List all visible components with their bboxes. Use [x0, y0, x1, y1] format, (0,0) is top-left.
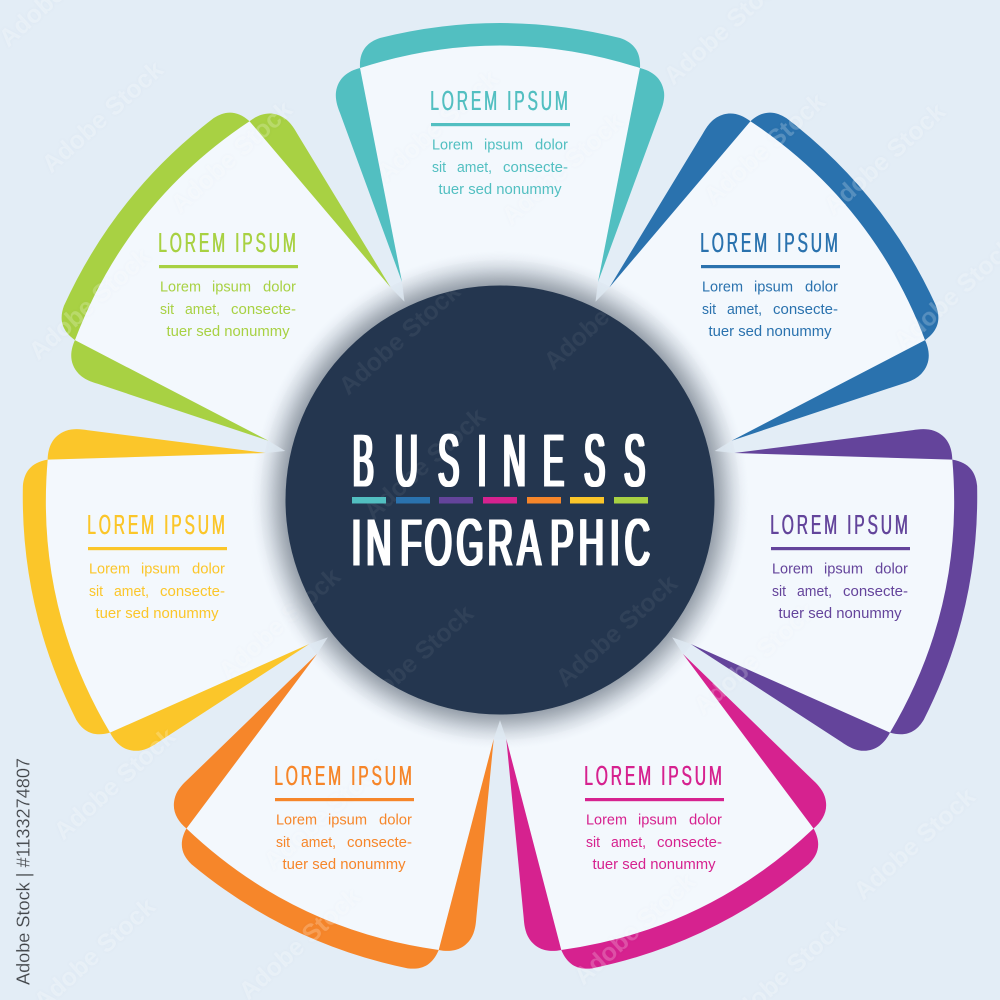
central circle [286, 286, 714, 714]
text block: yellow: amet, [114, 584, 149, 600]
text block: blue [700, 227, 840, 340]
panel: orange petal [145, 429, 648, 1000]
text block: teal: amet, [457, 160, 492, 176]
watermarks on light areas: Adobe Stock [497, 107, 629, 231]
text block: yellow: Lorem [89, 562, 130, 578]
text block: blue: ipsum [754, 280, 793, 296]
text block: magenta: tuer sed nonummy [592, 857, 716, 873]
text block: yellow: LOREM IPSUM [87, 509, 228, 540]
watermarks on light areas: Adobe Stock [689, 597, 821, 721]
watermarks on light areas: Adobe Stock [166, 95, 298, 219]
text block: teal: tuer sed nonummy [438, 182, 562, 198]
text block: blue: consecte- [773, 302, 838, 318]
text block: orange [274, 760, 414, 873]
text block: purple: sit [772, 584, 786, 600]
watermarks on light areas: Adobe Stock [259, 752, 391, 876]
text block: teal: dolor [535, 138, 568, 154]
text block: yellow: dolor [192, 562, 225, 578]
panel: blue petal [398, 74, 975, 628]
text block: green: ipsum [212, 280, 251, 296]
text block: green: tuer sed nonummy [166, 324, 290, 340]
watermarks on circle: Adobe Stock [214, 562, 346, 686]
watermarks on light areas: Adobe Stock [849, 782, 981, 906]
watermarks on circle: Adobe Stock [539, 252, 671, 376]
text block: teal: Lorem [432, 138, 473, 154]
text block: yellow [87, 509, 228, 622]
text block: purple: tuer sed nonummy [778, 606, 902, 622]
text block: magenta: dolor [689, 812, 722, 828]
text block: orange: Lorem [276, 812, 317, 828]
text block: magenta [584, 760, 724, 873]
panel: purple petal [463, 340, 1000, 766]
watermarks on circle: Adobe Stock [359, 402, 491, 526]
text block: green: amet, [185, 302, 220, 318]
watermarks on circle: Adobe Stock [551, 569, 683, 693]
text block: orange: LOREM IPSUM [274, 760, 414, 791]
watermarks on light areas: Adobe Stock [819, 97, 951, 221]
text block: magenta: LOREM IPSUM [584, 760, 724, 791]
text block: orange: amet, [301, 835, 336, 851]
text block: purple [770, 509, 910, 622]
text block: purple: Lorem [772, 562, 813, 578]
text block: purple: amet, [797, 584, 832, 600]
text block: yellow: ipsum [141, 562, 180, 578]
text block: yellow: consecte- [160, 584, 225, 600]
text block: orange: sit [276, 835, 290, 851]
text block: teal [430, 85, 570, 198]
text block: blue: dolor [805, 280, 838, 296]
title: business: BUSINESS [353, 420, 645, 503]
text block: green: consecte- [231, 302, 296, 318]
text block: orange: dolor [379, 812, 412, 828]
watermarks on light areas: Adobe Stock [37, 55, 169, 179]
panel: teal petal [336, 23, 664, 500]
text block: blue: amet, [727, 302, 762, 318]
text block: purple: dolor [875, 562, 908, 578]
text block: orange: consecte- [347, 835, 412, 851]
title block [352, 420, 650, 581]
text block: magenta: ipsum [638, 812, 677, 828]
watermarks on circle [307, 291, 678, 688]
text block: blue: tuer sed nonummy [708, 324, 832, 340]
text block: purple: consecte- [843, 584, 908, 600]
text block: blue: Lorem [702, 280, 743, 296]
text block: purple: ipsum [824, 562, 863, 578]
text block: magenta: Lorem [586, 812, 627, 828]
text block: blue: LOREM IPSUM [700, 227, 840, 258]
text block: orange: ipsum [328, 812, 367, 828]
watermarks on circle: Adobe Stock [347, 599, 479, 723]
watermarks on circle: Adobe Stock [689, 597, 821, 721]
text block: magenta: sit [586, 835, 600, 851]
text block: green: LOREM IPSUM [158, 227, 298, 258]
panel: yellow petal [0, 340, 537, 766]
panel: green petal [25, 74, 602, 628]
watermarks on light areas: Adobe Stock [569, 867, 701, 991]
text block: teal: ipsum [484, 138, 523, 154]
panel: magenta petal [352, 429, 855, 1000]
watermarks on circle: Adobe Stock [334, 277, 466, 401]
stock id label: Adobe Stock | #1133274807 [14, 758, 34, 985]
watermarks on light areas: Adobe Stock [214, 562, 346, 686]
watermarks on light areas: Adobe Stock [372, 64, 504, 188]
central circle shadow [251, 251, 749, 749]
text block: yellow: sit [89, 584, 103, 600]
text block: yellow: tuer sed nonummy [96, 606, 219, 622]
text block: blue: sit [702, 302, 716, 318]
text block: magenta: consecte- [657, 835, 722, 851]
text block: green: dolor [263, 280, 296, 296]
watermarks on light areas: Adobe Stock [24, 242, 156, 366]
text block: teal: sit [432, 160, 446, 176]
text block: magenta: amet, [611, 835, 646, 851]
central circle soft halo over gaps [260, 260, 740, 740]
watermarks on light areas: Adobe Stock [699, 87, 831, 211]
text block: green [158, 227, 298, 340]
text block: teal: LOREM IPSUM [430, 85, 570, 116]
text block: teal: consecte- [503, 160, 568, 176]
colour bars [352, 497, 648, 504]
text block: orange: tuer sed nonummy [282, 857, 406, 873]
watermarks on light areas: Adobe Stock [49, 722, 181, 846]
text block: green: Lorem [160, 280, 201, 296]
text block: green: sit [160, 302, 174, 318]
title: infographic: INFOGRAPHIC [352, 507, 650, 581]
